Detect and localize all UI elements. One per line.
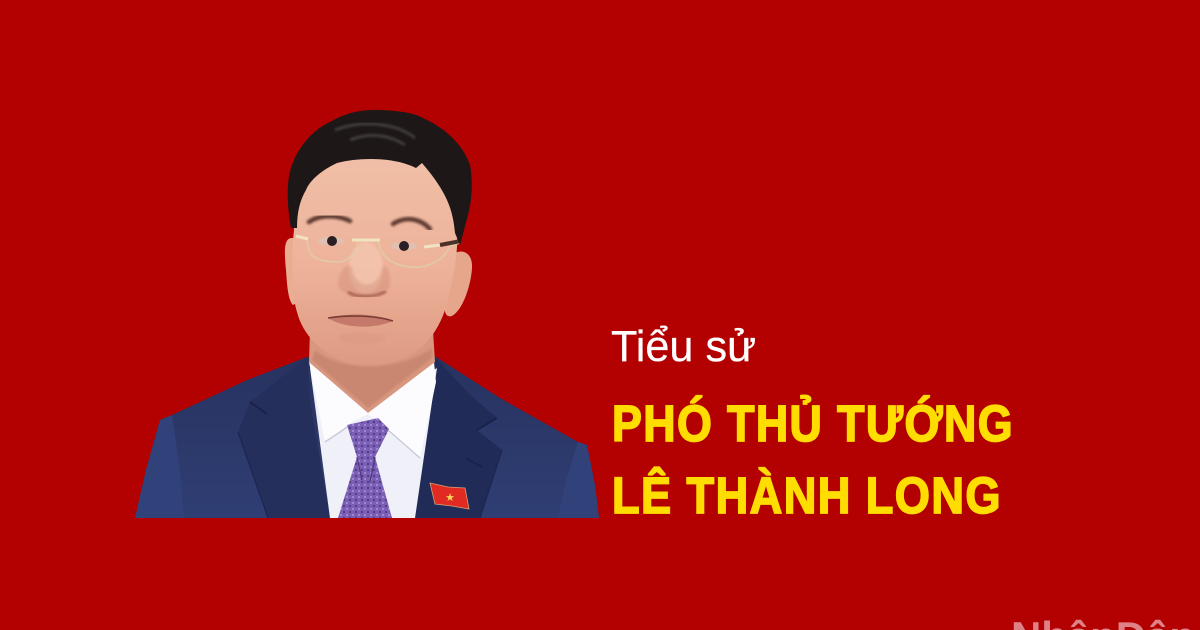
eyes xyxy=(318,236,417,251)
necktie xyxy=(338,418,392,518)
face xyxy=(292,145,457,365)
neck xyxy=(309,330,435,413)
heading line 2: LÊ THÀNH LONG xyxy=(612,466,1002,524)
lapel pin: ★ xyxy=(445,492,455,504)
facial shading xyxy=(328,242,393,344)
shirt and collar xyxy=(309,362,437,518)
lapel pin xyxy=(430,483,469,509)
subtitle: Tiểu sử xyxy=(611,322,756,371)
glasses xyxy=(296,236,461,267)
chin shadow xyxy=(312,348,432,408)
heading line 1: PHÓ THỦ TƯỚNG xyxy=(612,394,1014,452)
ears xyxy=(285,238,472,316)
hair xyxy=(288,110,472,245)
portrait xyxy=(135,110,599,518)
eyebrows xyxy=(309,216,430,229)
hair highlight xyxy=(335,124,415,145)
suit jacket xyxy=(135,355,599,518)
